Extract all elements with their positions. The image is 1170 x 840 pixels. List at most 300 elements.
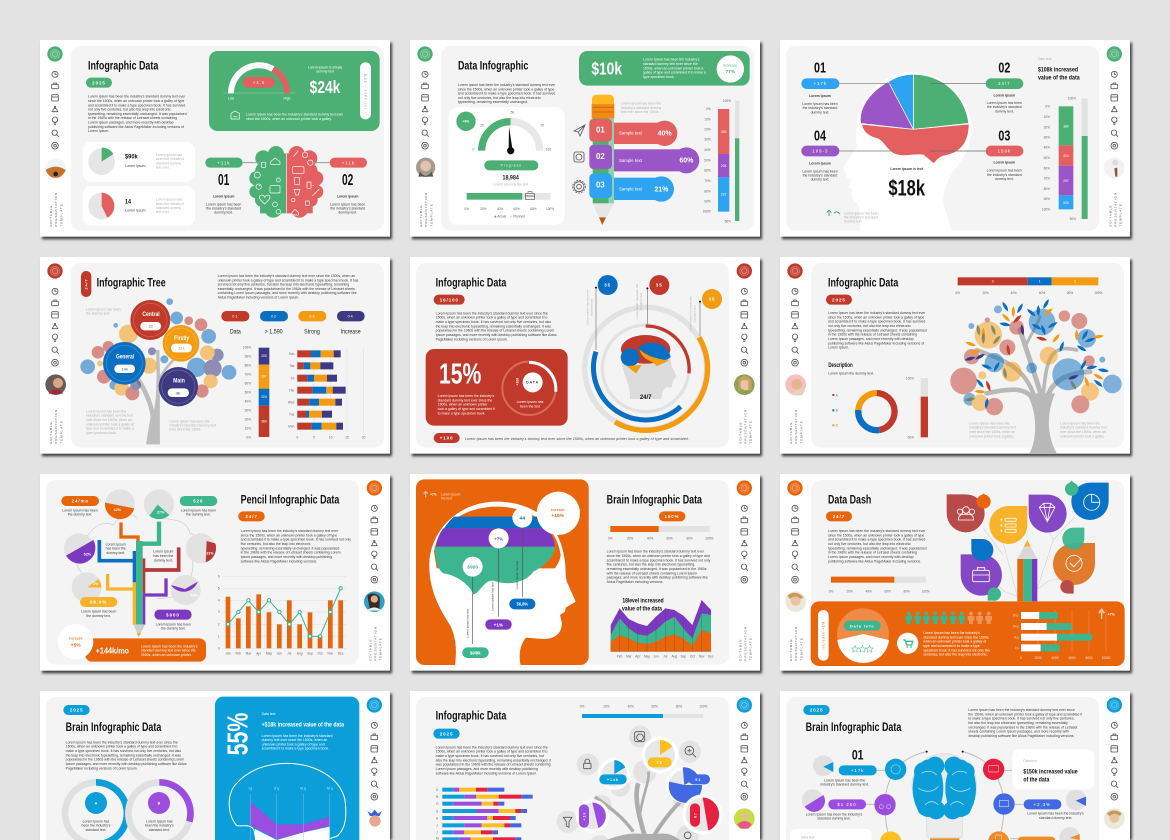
footer note [434, 433, 689, 443]
combo chart: 1 [218, 634, 220, 638]
pie 1%: 1% [93, 582, 98, 586]
combo chart: Feb [236, 651, 241, 655]
ring A: Lorem Ipsum has [83, 819, 110, 823]
drop: diamond [1029, 495, 1067, 533]
panel: slide 1 infographic data [40, 40, 392, 239]
panel text: specimen book. It has survived not only five [923, 648, 990, 652]
pill [63, 705, 90, 715]
sidebar [737, 480, 753, 661]
gray notes: Lorem Ipsum has been the [969, 421, 1010, 425]
body text: publishing software like Aldus PageMaker including versions of [828, 341, 924, 345]
gauge card: Lorem Ipsum is the text [493, 183, 528, 187]
sidebar [785, 263, 806, 444]
callout 01: Lorem Ipsum [809, 94, 831, 98]
white box right: of the data [1023, 777, 1050, 784]
panel: green gauge: since the 1500s, when an unknown printer took a galley. [246, 117, 332, 121]
sidebar [1104, 46, 1125, 227]
node: firstly: Firstly [174, 335, 190, 342]
body text: unknown printer took a galley of type and scrambled it to make a type specimen book. It has [218, 278, 359, 282]
body text: typesetting, remaining essentially unchanged. It was popularised [828, 546, 927, 550]
top progress bar: 20% [603, 705, 610, 709]
progress bar: 40% [866, 589, 872, 593]
note with icon: dummy text. [844, 220, 862, 224]
body text: since the 1500s, when an unknown printer took a galley of type and [607, 554, 710, 558]
progress bar [608, 526, 714, 541]
callout $900: $900 [166, 612, 180, 617]
gauge card: 40% [497, 207, 503, 211]
callout +2,3% [1024, 790, 1086, 820]
drop: check [1053, 528, 1095, 594]
sidebar: EDITABLE [368, 638, 372, 661]
stacked bar: 60% [704, 169, 711, 173]
body text: PageMaker including versions of Lorem Ipsum. [436, 337, 508, 341]
increase pill [818, 610, 829, 661]
combo chart: Nov [328, 651, 334, 655]
gauge card [449, 107, 565, 225]
combo chart: Jun [277, 651, 282, 655]
stacked bar [1042, 105, 1073, 211]
callout 01: +17k [814, 81, 827, 86]
quarter bar chart: 2000 [1034, 656, 1042, 660]
head with brain: 24/7 [640, 394, 652, 401]
legend pills: 02 [271, 315, 277, 319]
legend pills: 03 [309, 315, 315, 319]
stacked bar: 389 [721, 130, 727, 134]
body text: Lorem Ipsum passages, and more recently with desktop publishing [436, 767, 538, 771]
combo chart: 3 [218, 610, 220, 614]
body text: Lorem Ipsum passages, and more recently with desktop [828, 555, 914, 559]
stacked bar: 0% [1045, 105, 1050, 109]
legend pills: 04 [348, 315, 354, 319]
horizontal bar chart: Sat [290, 364, 294, 368]
callout 01: industry's standard dummy text. [820, 783, 869, 787]
quarter bar chart: 10000 [1102, 656, 1111, 660]
ring B: Lorem Ipsum has [146, 819, 173, 823]
bar 03 [589, 174, 674, 202]
marker $900 [462, 557, 489, 658]
legend pills: Increase [341, 329, 361, 336]
callout $1 250 [802, 789, 866, 821]
pie 1% [72, 572, 102, 602]
quarter bar chart: I q [1015, 646, 1019, 650]
marker +7%: +7% [494, 536, 503, 542]
bar 01: 01 [596, 124, 605, 134]
body text: Lorem Ipsum has been the industry's standard dummy text ever since the [66, 740, 178, 744]
panel: slide 11 tree pies [410, 691, 762, 840]
stacked bar: 90% [704, 199, 711, 203]
pill [433, 729, 460, 739]
bar 01: Sample text [619, 131, 643, 136]
panel: green gauge: Lorem Ipsum is simply [308, 65, 342, 69]
body text: typesetting, remaining essentially unchanged. [458, 100, 528, 104]
thin progress bar: 100% [723, 99, 731, 103]
area chart: Mar [626, 655, 631, 659]
gauge card: 100% [546, 207, 554, 211]
gauge card: Actual [497, 215, 506, 219]
note with icon [827, 210, 879, 224]
callout 01: 01 [852, 746, 864, 762]
marker 2: Lorem Ipsum has been the [635, 284, 639, 319]
stacked bar: 204 [261, 395, 267, 399]
donut legend [832, 393, 839, 428]
thin progress bar [1068, 97, 1088, 221]
body text: publishing software like Aldus PageMaker including versions of [88, 125, 184, 129]
callout 01: Lorem Ipsum has been [206, 202, 241, 206]
white box right [1012, 749, 1094, 789]
stacked bar: 70% [245, 373, 251, 377]
white box left [790, 829, 872, 840]
body text: Lorem Ipsum has been the industry's standard dummy text ever [828, 311, 926, 315]
stacked bar: 0% [706, 107, 711, 111]
bar 02: Sample text [619, 158, 643, 163]
pill: 2025 [810, 708, 823, 713]
marker 2 [635, 275, 669, 325]
red panel: 15%: took a galley of type and scrambled it [438, 407, 495, 411]
pie royal: 91 [695, 778, 701, 782]
combo chart: 2 [218, 622, 220, 626]
stacked bar [703, 107, 729, 214]
panel: slide 2 data infographic [410, 40, 762, 239]
panel: $10k: Lorem Ipsum has been the industry's [643, 58, 700, 62]
sidebar: TEMPLATE [749, 420, 753, 444]
gauge card: 75 [540, 124, 544, 128]
body text: also the leap into electronic typesetting, remaining essentially unchanged. It [436, 758, 551, 762]
quarter bar chart: II q [1014, 635, 1019, 639]
node: firstly [163, 325, 199, 362]
brain bands [435, 517, 555, 594]
callout 526: the dummy text. [186, 513, 211, 517]
body text: since the 1500s, when an unknown printer took a galley of type [88, 99, 184, 103]
pill: 2025 [70, 708, 83, 713]
bar 02: 60% [679, 156, 694, 165]
callout 04 [801, 128, 894, 182]
body text: Lorem Ipsum. [828, 346, 849, 350]
body text: containing Lorem Ipsum passages, and more recently with desktop publishing software like [218, 291, 357, 295]
marker 1: Lorem Ipsum has been the [586, 289, 590, 325]
pie 27% [144, 489, 174, 519]
progress bar: 60% [666, 537, 673, 541]
body text: passages, and more recently with desktop publishing software like [607, 576, 708, 580]
body text: typesetting, remaining essentially unchanged. It was popularised [828, 328, 927, 332]
title: Infographic Tree [97, 276, 166, 290]
quarter bar chart: 4000 [1051, 656, 1059, 660]
increase bubble [537, 492, 580, 535]
callout 03: 03 [998, 128, 1010, 144]
body text: Lorem Ipsum has been the industry's standard dummy text ever [607, 550, 705, 554]
quarter bar chart: +7% [1107, 612, 1115, 616]
branch notes: Lorem Ipsum [153, 550, 174, 554]
sidebar [45, 46, 66, 227]
pill [434, 295, 465, 305]
panel: slide 7 pencil infographic [40, 474, 392, 673]
callout +2,3%: +2,3% [1034, 802, 1051, 807]
ring B: standard text. [149, 828, 170, 832]
tree bubbles [950, 305, 1122, 415]
panel: green gauge: Increase - 20% [364, 73, 368, 109]
horizontal bar chart: 5 [313, 435, 315, 439]
donut legend: B [836, 409, 838, 413]
body text: five centuries, but also the leap into electronic typesetting, [607, 563, 695, 567]
panel text: centuries, but also the leap into electronic. [923, 653, 988, 657]
panel: $10k [579, 51, 750, 86]
progress bar: 80% [904, 589, 910, 593]
gray notes: Lorem Ipsum has been the [86, 409, 126, 413]
area chart: 18level increased [622, 597, 664, 604]
area chart: Sep [681, 655, 686, 659]
gray notes: Lorem Ipsum has been the [1060, 421, 1100, 425]
title: Data Infographic [458, 58, 528, 72]
area chart [611, 597, 714, 659]
gray notes: type and scrambled it to make a [86, 427, 134, 431]
branch notes: has been the [153, 554, 173, 558]
body text: typesetting, remaining essentially unchanged. It was popularised [241, 546, 339, 550]
top stacked bar: 80% [1067, 291, 1073, 295]
callout 04: Lorem Ipsum [809, 161, 831, 165]
horizontal bar chart: 20 [362, 435, 366, 439]
tree trunk [132, 350, 177, 444]
progress bar: 80% [686, 537, 693, 541]
callout $1 250: standard dummy text. [817, 817, 851, 821]
panel: $10k: standard dummy text ever since the [643, 62, 698, 66]
sidebar [734, 697, 755, 829]
area chart: Jun [653, 655, 659, 659]
gauge card: 80% [530, 207, 537, 211]
data info circle: Data Info [850, 624, 875, 628]
pie 42%: 42% [114, 508, 122, 512]
top stacked bar: 60% [1039, 291, 1045, 295]
node: general: 19k [121, 366, 128, 371]
top stacked bar: 3 [992, 280, 994, 284]
pie 31% [186, 533, 216, 563]
body text: typesetting, remaining essentially unchanged. It was popularised [88, 112, 187, 116]
icon: cart [897, 633, 918, 654]
callout 04: 04 [814, 128, 827, 144]
callout 58.9%: 58.9% [90, 600, 107, 605]
monthly stacked bars: J [436, 831, 438, 835]
progress bar: 0% [608, 537, 613, 541]
stacked bar: 389 [1063, 124, 1069, 128]
panel: $10k: $10k [591, 59, 622, 79]
bar 03: Sample text [619, 186, 643, 191]
gray notes: unknown printer took a galley. [969, 434, 1014, 438]
pie red: 67 [693, 812, 697, 818]
blue panel: 55% [223, 713, 255, 755]
gray notes: ever since the 1500s, when an [969, 430, 1015, 434]
gauge card: +9% [463, 120, 469, 124]
body text: the leap into electronic typesetting, remaining essentially unchanged. It was [436, 324, 551, 328]
stacked bar: 0% [246, 435, 251, 439]
stacked bar: 90% [245, 355, 251, 359]
node: clock [885, 759, 906, 780]
increase bubble: Increase [551, 508, 565, 512]
top-left note: Lorem Ipsum [441, 492, 461, 496]
sidebar: EDITABLE [738, 421, 742, 444]
brain area chart: II q [274, 787, 279, 791]
panel text: standard dummy text ever since the 1500s, [923, 635, 989, 639]
sidebar: PRESENTATION [1113, 192, 1117, 227]
pie 65%: 65% [191, 594, 199, 598]
head with brain [621, 335, 677, 401]
node: main: 8k [176, 390, 180, 395]
panel: $10k: 77% [726, 69, 736, 74]
node: general [103, 342, 146, 385]
brain area chart: IV q [327, 787, 333, 791]
callout 02: dummy text. [338, 211, 357, 215]
body text: Ipsum passages, and more recently with desktop publishing software like Aldus [66, 762, 187, 766]
tree leaves [964, 298, 1109, 409]
horizontal bar chart: 0 [296, 435, 298, 439]
body text: make a type specimen book. It has survived not only five centuries, but also [436, 320, 551, 324]
callout 02: 24/7 [998, 81, 1011, 86]
panel: slide 8 brain infographic orange [410, 474, 762, 673]
body text: Lorem Ipsum has been the industry's standard dummy text ever since the [436, 745, 548, 749]
horizontal bar chart: Wed [288, 400, 295, 404]
area chart: Nov [699, 655, 705, 659]
pie red [682, 794, 722, 834]
callout 02: +11k [342, 160, 355, 165]
top progress bar: 0% [580, 705, 584, 709]
white box right: Data text [1023, 759, 1037, 763]
callout 02: Lorem Ipsum [337, 195, 359, 199]
stacked bar: 204 [721, 164, 727, 168]
sidebar: TEMPLATE [429, 203, 433, 227]
stacked bar: 60% [245, 382, 251, 386]
body text: Lorem Ipsum has been the industry's standard dummy text ever [241, 529, 339, 533]
stacked bar: 297 [261, 375, 267, 379]
body text: make a type specimen book. It has survived not only five centuries, but [436, 754, 544, 758]
panel: slide 5 rings and head [410, 257, 762, 456]
body text: unchanged. It was popularised in the 1960s with the release of Letraset [968, 725, 1077, 729]
monthly stacked bars: D [436, 788, 439, 792]
sidebar [367, 697, 382, 827]
body text: PageMaker including versions of Lorem Ipsum. [66, 766, 138, 770]
stacked bar: 20% [1044, 125, 1050, 129]
marker +7% [485, 528, 512, 630]
body text: and scrambled it to make a type specimen book. It has survived [828, 320, 925, 324]
panel text: Lorem Ipsum has been the industry's [923, 631, 980, 635]
callout 526 [180, 496, 217, 517]
callout 24/mo [61, 496, 99, 517]
stacked bar: 80% [245, 364, 251, 368]
gray notes: industry's standard dummy text [169, 423, 216, 427]
callout 24/mo: the dummy text. [68, 513, 92, 517]
top stacked bar: 0% [955, 291, 960, 295]
combo chart: 5 [218, 586, 220, 590]
gray notes: ever since the 1500s. [169, 428, 201, 432]
top stacked bar: 1 [1039, 280, 1041, 284]
brain pie chart [860, 74, 969, 163]
brain area chart: I q [249, 787, 252, 791]
node: general: General [116, 354, 134, 361]
callout 02 [313, 158, 367, 215]
card: $90k pie: text ever. [156, 165, 170, 169]
legend pills: 01 [232, 315, 238, 319]
footer note: +100 [440, 436, 454, 441]
card: $90k pie [83, 142, 195, 182]
callout 01: dummy text. [214, 211, 233, 215]
callout 01: 01 [814, 61, 826, 77]
node: phone [988, 831, 1009, 840]
sidebar: TEMPLATE [379, 637, 383, 661]
sidebar: TEMPLATE [799, 637, 803, 661]
marker $900: Lorem Ipsum has text [465, 609, 469, 638]
red panel: 15%: Lorem Ipsum has [517, 400, 544, 404]
sidebar [1104, 697, 1125, 829]
stacked bar: 40% [245, 400, 251, 404]
red panel: 15% [426, 349, 568, 426]
horizontal bar chart: 15 [345, 435, 349, 439]
gray notes [969, 421, 1107, 438]
red panel: 15%: Lorem Ipsum has been the industry's [438, 394, 494, 398]
callout 01: dummy text. [811, 110, 829, 114]
pie 65% [171, 575, 201, 605]
card: $90k pie: Lorem Ipsum has [156, 153, 182, 157]
orange banner: +5% [71, 642, 81, 648]
thin bar: 100% [906, 376, 914, 380]
panel: slide 4 infographic tree [40, 257, 392, 456]
callout 03: Lorem Ipsum [993, 161, 1015, 165]
horizontal bar chart: 10 [329, 435, 333, 439]
combo chart [218, 575, 346, 655]
panel: $10k: type specimen book. [643, 75, 675, 79]
sidebar: PRESENTATION [424, 192, 428, 227]
title: Infographic Data [436, 276, 506, 290]
white box right: $150k increased value [1023, 769, 1078, 776]
pie 27%: 27% [157, 511, 165, 515]
stacked bar: 60% [1044, 166, 1050, 170]
orange banner [58, 624, 206, 662]
icons: plane, camera, gear [573, 125, 585, 193]
sidebar: EDITABLE [789, 638, 793, 661]
body text: software like Aldus PageMaker including versions. [241, 559, 317, 563]
callout $900 [154, 610, 192, 631]
gray note: industry's standard dummy [621, 106, 662, 110]
vertical pill [81, 271, 91, 297]
gray background nodes [557, 726, 701, 840]
top stacked bar: 2 [1074, 280, 1076, 284]
body text: the 1500s, when an unknown printer took a galley of type and scrambled it [968, 712, 1082, 716]
body text: but also the leap into electronic typesetting, remaining essentially [968, 721, 1068, 725]
drop: pie icon [1065, 481, 1109, 520]
gray notes: ever since the 1500s, when an [86, 418, 132, 422]
gray notes: industry's standard dummy text [86, 414, 133, 418]
body text: 1500s, when an unknown printer took a galley of type and scrambled it to [66, 745, 177, 749]
brain area chart: III q [300, 787, 306, 791]
stacked bar: 40% [704, 148, 711, 152]
callout 01: Lorem Ipsum [213, 195, 235, 199]
branch notes: dummy text. [154, 558, 173, 562]
progress bar: 100% [922, 589, 930, 593]
body text: desktop publishing software like Aldus PageMaker including versions. [968, 734, 1075, 738]
stacked bar: 70% [1044, 177, 1050, 181]
card: 14 pie: standard dummy [156, 206, 181, 210]
body text: with the release of Letraset sheets containing Lorem Ipsum [607, 571, 697, 575]
callout 58.9% [80, 597, 117, 618]
body text: and scrambled it to make a type specimen book. It has survived [458, 92, 555, 96]
thin bar: 50% [908, 435, 914, 439]
pill: 2025 [832, 297, 846, 302]
body text: since the 1500s, when an unknown printer took a galley of type [241, 533, 337, 537]
node: main [159, 367, 198, 406]
gauge card: 0 [472, 148, 474, 152]
body text: software like Aldus PageMaker including versions of Lorem Ipsum. [436, 771, 537, 775]
gray notes: unknown printer took a galley. [1060, 434, 1105, 438]
marker $900: $900 [467, 565, 478, 571]
callout 01: +11k [217, 160, 231, 165]
quarter bar chart: 6000 [1068, 656, 1076, 660]
brain [913, 751, 976, 819]
blue panel: +$18k increased value of the data [262, 721, 344, 728]
